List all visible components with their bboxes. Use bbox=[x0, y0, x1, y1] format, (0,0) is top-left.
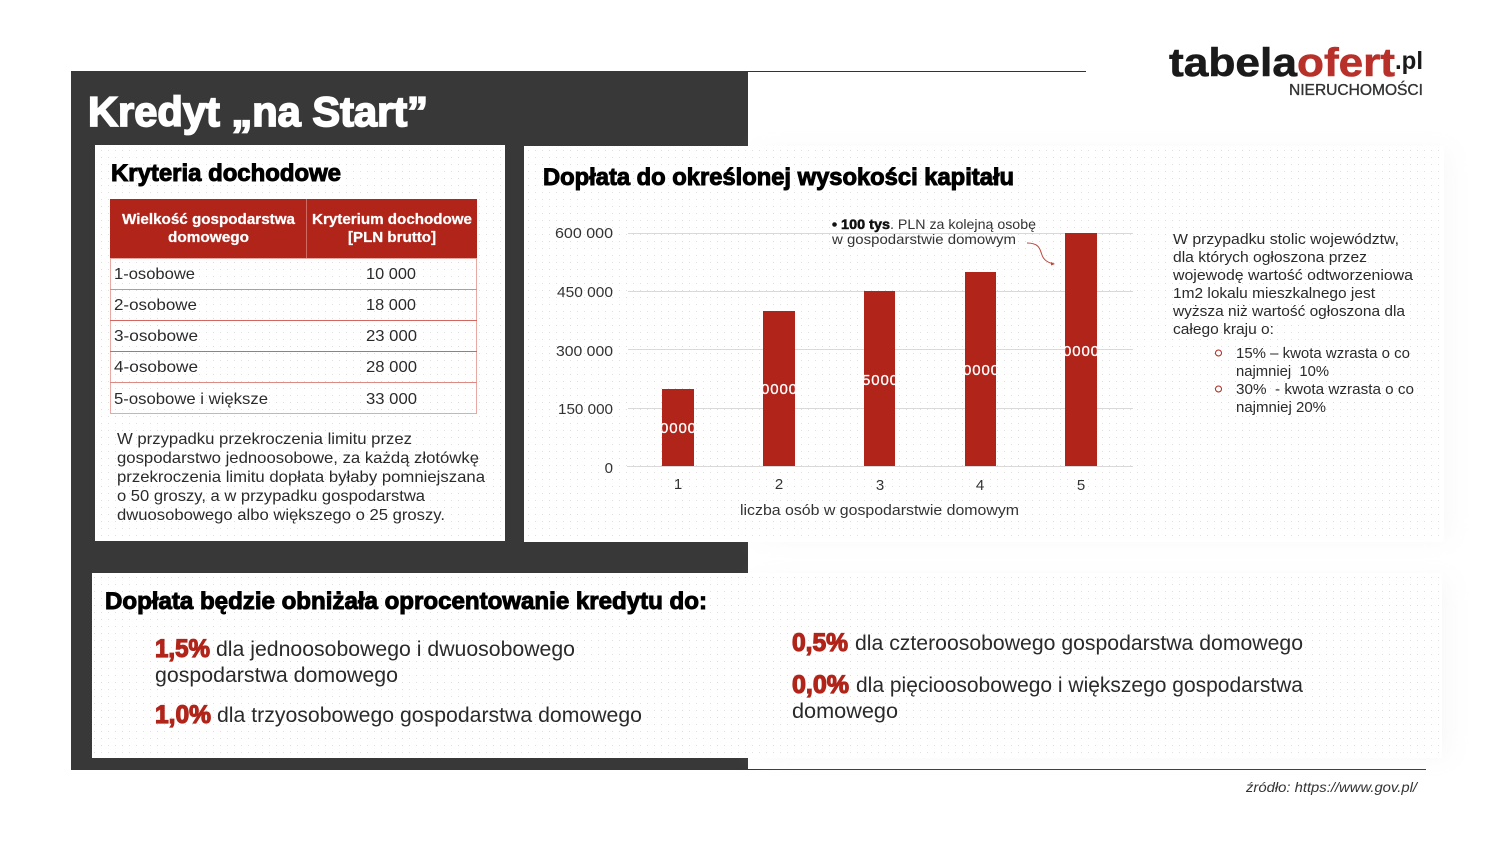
note on exceeding the limit: przekroczenia limitu dopłata byłaby pomniejszana bbox=[117, 469, 485, 486]
heading: interest rate reduction: Dopłata będzie obniżała oprocentowanie kredytu do: bbox=[105, 588, 707, 615]
income table: 2-osobowe bbox=[114, 297, 197, 314]
bar chart: 4 bbox=[976, 477, 984, 494]
title: Kredyt „na Start” bbox=[88, 88, 428, 135]
side note on voivodeship capitals: całego kraju o: bbox=[1173, 321, 1274, 338]
logo: tabela bbox=[1169, 41, 1298, 85]
logo: .pl bbox=[1395, 47, 1423, 75]
bar chart: liczba osób w gospodarstwie domowym bbox=[740, 502, 1019, 519]
rate 1.0%: dla trzyosobowego gospodarstwa domowego bbox=[217, 704, 642, 727]
bar chart: 5 bbox=[1077, 477, 1085, 494]
side note on voivodeship capitals bbox=[1172, 231, 1414, 416]
income table bbox=[110, 199, 477, 414]
income table: 1-osobowe bbox=[114, 266, 195, 283]
bar chart: 0000 bbox=[963, 362, 999, 379]
side note on voivodeship capitals: dla których ogłoszona przez bbox=[1173, 249, 1367, 266]
rate 0.5%: dla czteroosobowego gospodarstwa domowego bbox=[855, 632, 1303, 655]
bar chart: 0000 bbox=[660, 420, 696, 437]
rate 0.0%: domowego bbox=[792, 700, 898, 723]
heading: income criteria: Kryteria dochodowe bbox=[111, 160, 341, 187]
chart annotation bbox=[831, 216, 1036, 247]
income table: 10 000 bbox=[366, 266, 416, 283]
rate 1.0%: 1,0% bbox=[155, 701, 211, 729]
side note on voivodeship capitals: 30% - kwota wzrasta o co bbox=[1236, 381, 1414, 398]
note on exceeding the limit bbox=[117, 431, 485, 524]
arrow bbox=[1027, 243, 1055, 266]
panel: subsidy up to capital bbox=[524, 146, 1444, 542]
income table: domowego bbox=[168, 229, 249, 246]
income table: 4-osobowe bbox=[114, 359, 198, 376]
side note on voivodeship capitals: W przypadku stolic województw, bbox=[1173, 231, 1399, 248]
income table: 33 000 bbox=[366, 391, 417, 408]
side note on voivodeship capitals: 1m2 lokalu mieszkalnego jest bbox=[1173, 285, 1376, 302]
panel: income criteria bbox=[95, 145, 505, 541]
bar chart: 2 bbox=[775, 476, 783, 493]
note on exceeding the limit: gospodarstwo jednoosobowe, za każdą złotówkę bbox=[117, 450, 479, 467]
income table: 28 000 bbox=[366, 359, 417, 376]
bar chart: 1 bbox=[674, 476, 682, 493]
bar chart: 300 000 bbox=[556, 343, 613, 360]
side note on voivodeship capitals: najmniej 10% bbox=[1236, 363, 1329, 380]
note on exceeding the limit: dwuosobowego albo większego o 25 groszy. bbox=[117, 507, 445, 524]
side note on voivodeship capitals: wojewodę wartość odtworzeniowa bbox=[1172, 267, 1414, 284]
bar chart bbox=[555, 225, 1133, 519]
bar chart: 600 000 bbox=[555, 225, 613, 242]
income table: 5-osobowe i większe bbox=[114, 391, 268, 408]
side note on voivodeship capitals: wyższa niż wartość ogłoszona dla bbox=[1172, 303, 1406, 320]
bar chart: 0 bbox=[605, 460, 613, 477]
logo: NIERUCHOMOŚCI bbox=[1289, 81, 1423, 99]
dark background panel bbox=[71, 71, 748, 770]
rate 0.0%: 0,0% bbox=[792, 671, 849, 699]
bar chart: 450 000 bbox=[557, 284, 613, 301]
heading: subsidy up to capital: Dopłata do określonej wysokości kapitału bbox=[543, 164, 1014, 191]
income table: Kryterium dochodowe bbox=[312, 211, 472, 228]
income table: 3-osobowe bbox=[114, 328, 198, 345]
rate 1.5% bbox=[155, 635, 575, 687]
bar chart: 5000 bbox=[862, 372, 898, 389]
bar chart: 0000 bbox=[1063, 343, 1099, 360]
note on exceeding the limit: o 50 groszy, a w przypadku gospodarstwa bbox=[117, 488, 425, 505]
chart annotation: . PLN za kolejną osobę bbox=[890, 216, 1036, 232]
rate 1.5%: 1,5% bbox=[155, 635, 210, 663]
bar chart: 3 bbox=[876, 477, 884, 494]
income table: Wielkość gospodarstwa bbox=[122, 211, 296, 228]
rate 0.5%: 0,5% bbox=[792, 629, 848, 657]
rate 0.0%: dla pięcioosobowego i większego gospodarstwa bbox=[856, 674, 1303, 697]
income table: 23 000 bbox=[366, 328, 417, 345]
income table: [PLN brutto] bbox=[348, 229, 436, 246]
note on exceeding the limit: W przypadku przekroczenia limitu przez bbox=[117, 431, 412, 448]
rate 1.5%: dla jednoosobowego i dwuosobowego bbox=[216, 638, 575, 661]
logo: ofert bbox=[1297, 41, 1395, 85]
side note on voivodeship capitals: 15% – kwota wzrasta o co bbox=[1236, 345, 1410, 362]
source: źródło: https://www.gov.pl/ bbox=[1245, 779, 1419, 795]
bar chart: 0000 bbox=[761, 381, 797, 398]
chart annotation: • 100 tys bbox=[832, 216, 890, 232]
income table: 18 000 bbox=[366, 297, 416, 314]
rate 1.5%: gospodarstwa domowego bbox=[155, 664, 398, 687]
chart annotation: w gospodarstwie domowym bbox=[831, 231, 1016, 247]
bar chart: 150 000 bbox=[558, 401, 613, 418]
rate 0.0% bbox=[792, 671, 1303, 723]
side note on voivodeship capitals: najmniej 20% bbox=[1236, 399, 1326, 416]
logo bbox=[1169, 41, 1423, 99]
panel: interest rate reduction bbox=[92, 573, 1442, 758]
